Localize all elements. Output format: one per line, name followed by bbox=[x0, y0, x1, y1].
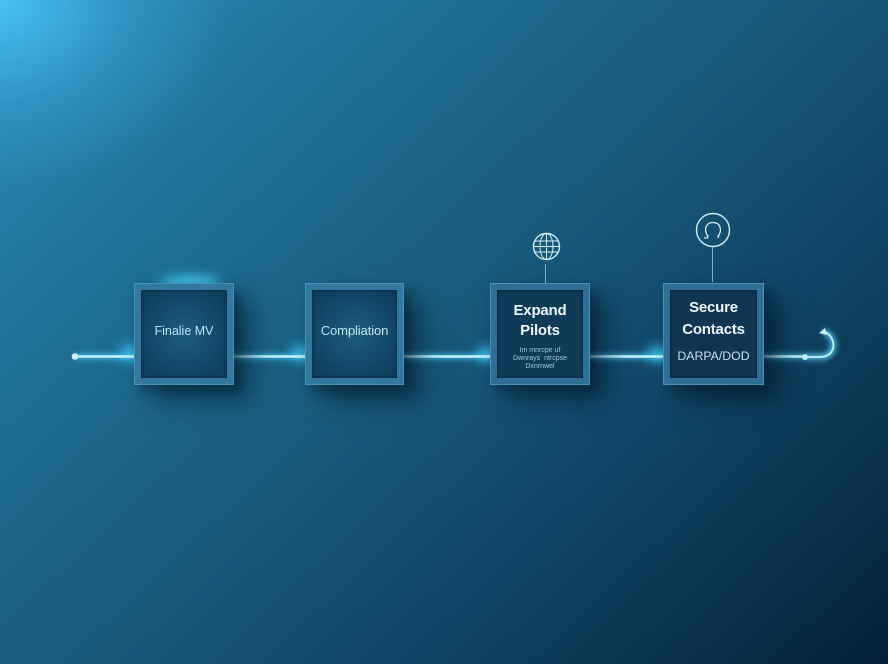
icon: headset circle bbox=[696, 212, 730, 282]
end node bbox=[802, 354, 808, 360]
step 3: Expand Pilots: Im mnrcpe uf bbox=[520, 347, 560, 354]
icon: globe bbox=[532, 232, 560, 283]
step 4: Secure Contacts bbox=[663, 283, 764, 385]
line glow bbox=[75, 354, 805, 358]
step 3: Expand Pilots: Expand bbox=[514, 302, 566, 319]
end hook glow bbox=[805, 331, 833, 357]
step 2: Compilation: Compliation bbox=[321, 323, 388, 338]
step 4: Secure Contacts: Secure bbox=[689, 299, 738, 316]
node glows bbox=[121, 345, 669, 361]
step 3: Expand Pilots: Dxnrnwel bbox=[525, 363, 555, 370]
step 4: Secure Contacts: DARPA/DOD bbox=[677, 349, 750, 363]
end arrow head bbox=[819, 328, 827, 335]
end hook bbox=[805, 331, 833, 357]
step 3: Expand Pilots: Dwnrays ntrcpse bbox=[513, 355, 567, 362]
step 3: Expand Pilots: Pilots bbox=[520, 322, 560, 339]
step 3: Expand Pilots bbox=[490, 283, 590, 385]
step 2: Compilation bbox=[305, 283, 404, 385]
step 1: Finalize MVP bbox=[134, 283, 234, 385]
line bbox=[75, 355, 805, 358]
start node bbox=[72, 353, 78, 360]
top glow above first box bbox=[160, 277, 220, 289]
step 4: Secure Contacts: Contacts bbox=[682, 321, 745, 338]
step 1: Finalize MVP: Finalie MV bbox=[154, 324, 214, 338]
